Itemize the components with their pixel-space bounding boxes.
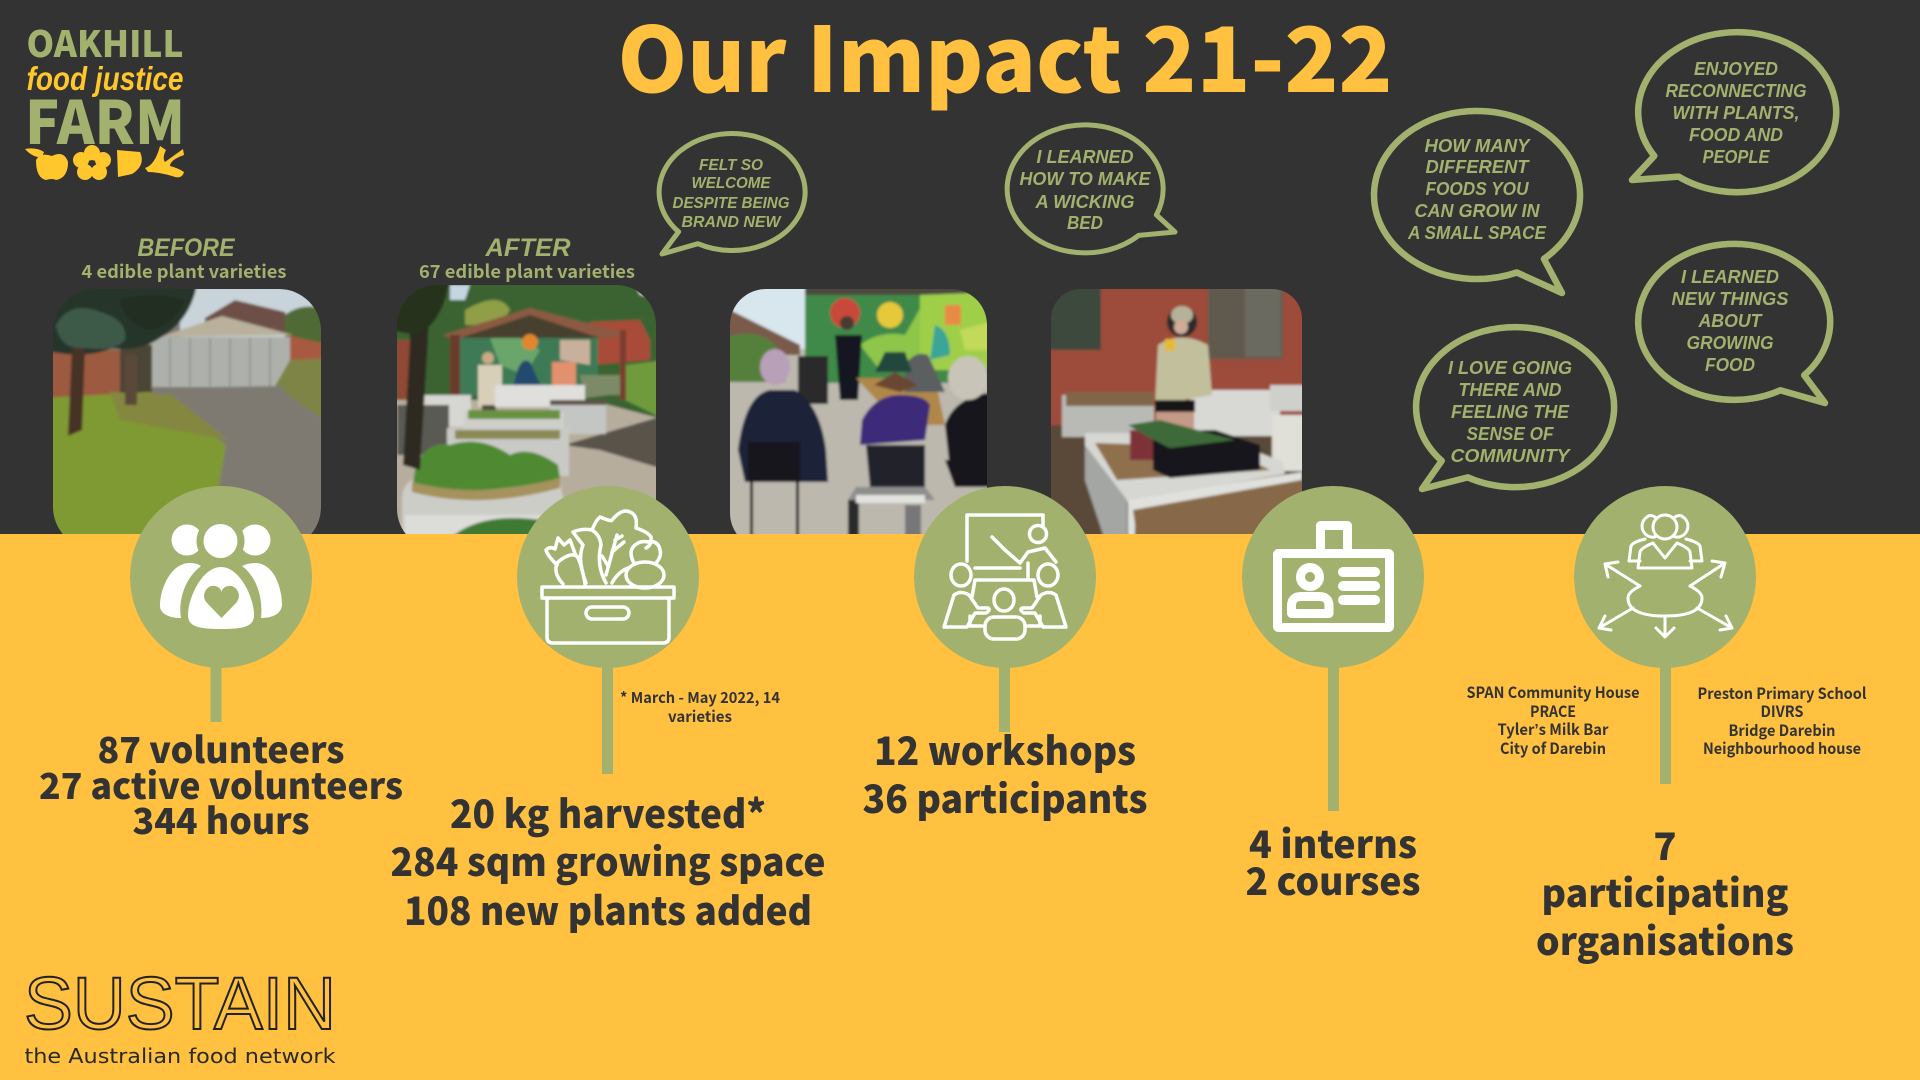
speech bubble: sense of community: THERE AND <box>1458 380 1562 400</box>
speech bubble: how many foods: CAN GROW IN <box>1414 201 1540 221</box>
partner list: right column: Preston Primary School <box>1698 682 1867 704</box>
logo: Oakhill food justice farm: OAKHILL <box>26 16 184 68</box>
speech bubble: sense of community <box>1416 327 1614 489</box>
logo: Oakhill food justice farm <box>25 16 185 180</box>
note: harvest period: * March - May 2022, 14 <box>620 687 780 708</box>
photo: after, garden beds and pergola <box>397 285 656 534</box>
speech bubble: sense of community: I LOVE GOING <box>1448 358 1572 378</box>
partner list: right column <box>1698 682 1867 759</box>
logo: Sustain: SUSTAIN <box>24 962 336 1045</box>
stat: harvest: 108 new plants added <box>404 881 812 937</box>
workshops marker and icon <box>914 486 1096 732</box>
stat: volunteers <box>39 722 403 845</box>
speech bubble: sense of community: FEELING THE <box>1451 402 1570 422</box>
partner list: right column: Bridge Darebin <box>1728 719 1836 741</box>
speech bubble: wicking bed: BED <box>1067 213 1103 233</box>
speech bubble: enjoyed reconnecting: PEOPLE <box>1702 147 1770 167</box>
speech bubble: felt so welcome: WELCOME <box>692 175 772 192</box>
speech bubble: felt so welcome <box>659 134 805 254</box>
speech bubble: enjoyed reconnecting: FOOD AND <box>1689 125 1783 145</box>
speech bubble: how many foods: DIFFERENT <box>1426 157 1531 177</box>
speech bubble: learned new things <box>1638 244 1830 403</box>
stat: organisations: organisations <box>1536 911 1794 966</box>
speech bubble: sense of community: SENSE OF <box>1466 424 1554 444</box>
speech bubble: how many foods <box>1374 111 1580 293</box>
volunteers marker and icon <box>130 486 312 722</box>
speech bubble: wicking bed <box>1007 125 1175 253</box>
note: harvest period: varieties <box>668 706 732 727</box>
partner list: right column: Neighbourhood house <box>1703 737 1861 759</box>
organisations marker and icon <box>1574 486 1756 784</box>
stat: organisations <box>1536 816 1794 966</box>
label: after <box>419 234 635 284</box>
stat: organisations: participating <box>1542 863 1788 918</box>
dark header background <box>0 0 1920 534</box>
stat: harvest: 284 sqm growing space <box>390 832 826 888</box>
label: before <box>82 234 287 284</box>
stat: volunteers: 344 hours <box>132 793 310 845</box>
speech bubble: how many foods: HOW MANY <box>1424 136 1532 156</box>
harvest marker and icon <box>517 486 699 774</box>
photo: before, empty driveway and garage <box>53 289 321 534</box>
logo: Oakhill food justice farm: food justice <box>26 60 184 97</box>
label: after: AFTER <box>484 234 570 262</box>
label: after: 67 edible plant varieties <box>419 258 635 284</box>
stat: volunteers: 27 active volunteers <box>39 758 403 810</box>
stat: volunteers: 87 volunteers <box>98 722 344 774</box>
photo: workshop participants under mural <box>730 289 987 534</box>
speech bubble: learned new things: FOOD <box>1705 355 1755 375</box>
speech bubble: enjoyed reconnecting: ENJOYED <box>1694 59 1778 79</box>
stat: interns <box>1246 814 1420 906</box>
partner list: left column: PRACE <box>1530 700 1576 722</box>
speech bubble: sense of community: COMMUNITY <box>1450 446 1572 466</box>
speech bubble: how many foods: FOODS YOU <box>1426 179 1529 199</box>
speech bubble: learned new things: ABOUT <box>1698 311 1763 331</box>
stat: workshops <box>862 721 1148 825</box>
stat: workshops: 12 workshops <box>874 721 1136 777</box>
stat: organisations: 7 <box>1653 816 1677 871</box>
speech bubble: how many foods: A SMALL SPACE <box>1407 223 1547 243</box>
partner list: left column: City of Darebin <box>1500 737 1606 759</box>
speech bubble: felt so welcome: FELT SO <box>699 157 764 174</box>
interns marker and icon <box>1242 486 1424 811</box>
logo: Sustain: the Australian food network <box>24 1044 336 1068</box>
stat: harvest <box>390 784 826 937</box>
stat: interns: 4 interns <box>1249 814 1417 869</box>
partner list: left column: SPAN Community House <box>1466 681 1640 703</box>
stat: harvest: 20 kg harvested* <box>450 784 766 840</box>
photo: intern standing among garden beds <box>1051 289 1302 534</box>
speech bubble: learned new things: NEW THINGS <box>1672 289 1788 309</box>
stat: interns: 2 courses <box>1246 851 1420 906</box>
speech bubble: felt so welcome: DESPITE BEING <box>672 195 790 212</box>
speech bubble: enjoyed reconnecting <box>1632 32 1836 192</box>
label: before: 4 edible plant varieties <box>82 258 287 284</box>
speech bubble: felt so welcome: BRAND NEW <box>682 214 782 231</box>
partner list: right column: DIVRS <box>1760 700 1804 722</box>
stat: workshops: 36 participants <box>862 769 1148 825</box>
speech bubble: learned new things: GROWING <box>1686 333 1774 353</box>
speech bubble: wicking bed: I LEARNED <box>1036 147 1134 167</box>
label: before: BEFORE <box>138 234 236 262</box>
speech bubble: enjoyed reconnecting: RECONNECTING <box>1666 81 1806 101</box>
yellow lower panel <box>0 534 1920 1080</box>
speech bubble: learned new things: I LEARNED <box>1681 267 1779 287</box>
partner list: left column: Tyler’s Milk Bar <box>1498 718 1609 740</box>
speech bubble: wicking bed: HOW TO MAKE <box>1020 169 1151 189</box>
note: harvest period <box>620 687 780 727</box>
partner list: left column <box>1466 681 1640 759</box>
speech bubble: wicking bed: A WICKING <box>1034 192 1134 212</box>
speech bubble: enjoyed reconnecting: WITH PLANTS, <box>1672 103 1800 123</box>
logo: Oakhill food justice farm: FARM <box>25 75 185 162</box>
